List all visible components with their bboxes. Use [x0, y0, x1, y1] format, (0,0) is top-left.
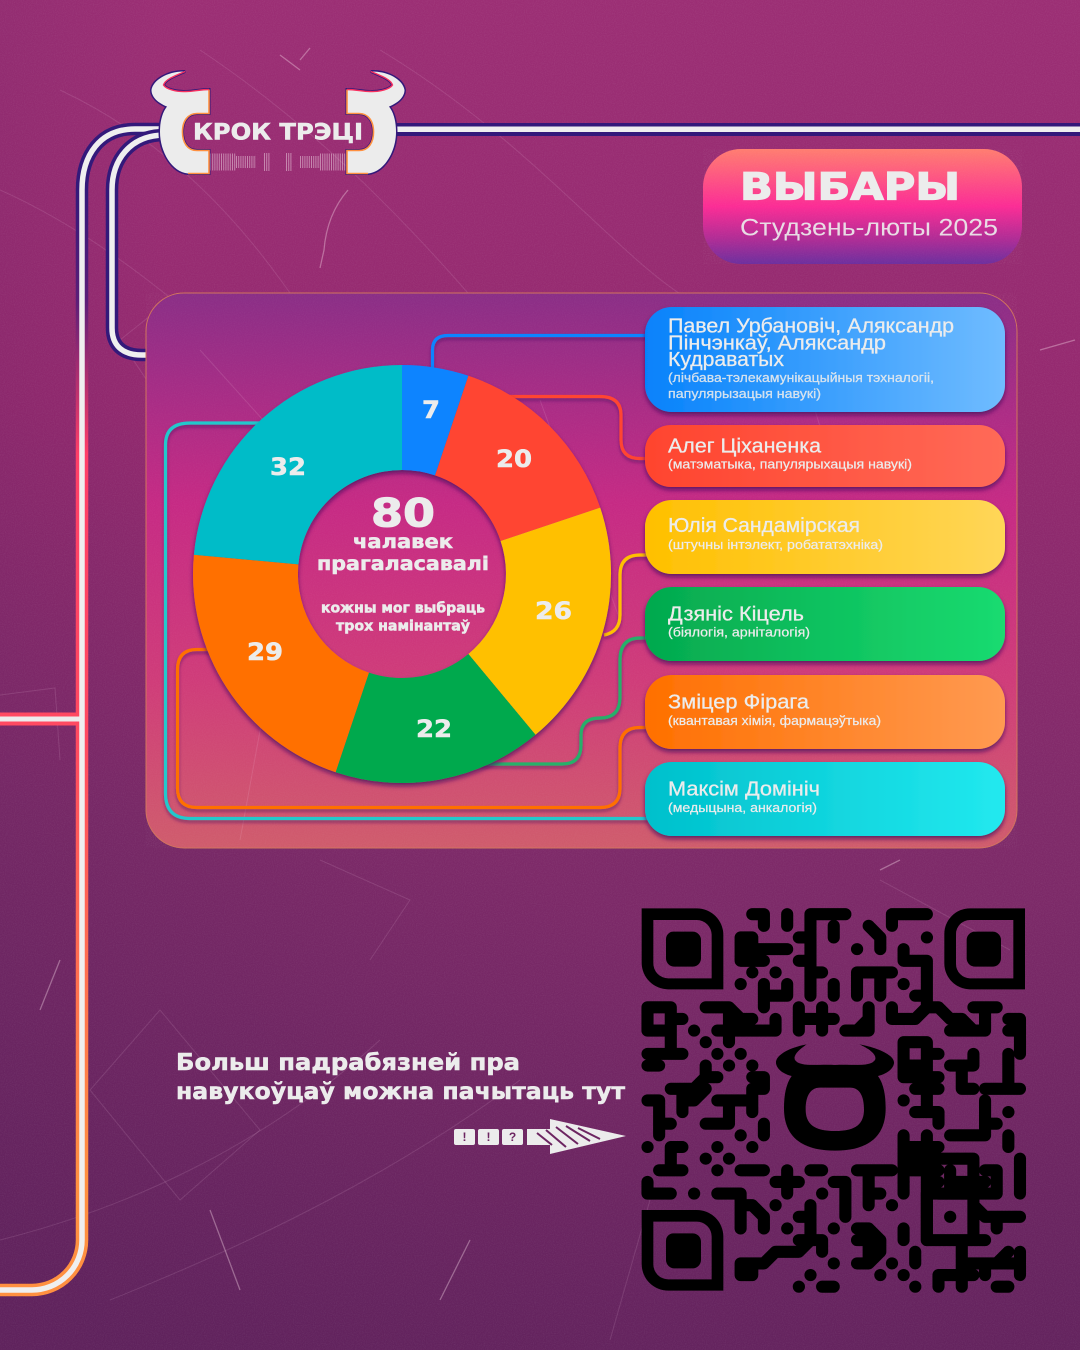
logo: audio wave	[210, 154, 346, 170]
arrow to the QR code: ?	[509, 1130, 516, 1144]
nominee: Sandamirskaya	[645, 500, 1005, 574]
nominee: Tsikhanenka: (матэматыка, папулярыхацыя навукі)	[668, 458, 912, 472]
value 20: 20	[496, 445, 532, 473]
segment 32	[194, 365, 402, 564]
note line 1: кожны мог выбраць	[321, 600, 485, 616]
value 32: 32	[270, 453, 306, 481]
donut centre text	[317, 492, 489, 634]
nominee: Sandamirskaya: (штучны інтэлект, робататэхніка)	[668, 538, 883, 552]
logo: wordmark: КРОК ТРЭЦІ	[193, 120, 363, 146]
panel: election results	[146, 293, 1017, 848]
note line 2: трох намінантаў	[336, 618, 470, 634]
nominee: Kitsel	[645, 587, 1005, 661]
left rail from logo to bottom	[0, 129, 165, 1290]
logo: right horn bracket	[347, 71, 404, 174]
nominee: Urbanovich, Pinchenkau, Kudravatykh: Павел Урбановіч, Аляксандр	[668, 314, 954, 338]
nominee: Kitsel: (біялогія, арніталогія)	[668, 626, 810, 640]
QR code	[642, 908, 1025, 1291]
nominee: Dominich	[645, 762, 1005, 836]
date: Студзень-люты 2025	[740, 214, 998, 242]
arrow to the QR code: !	[462, 1130, 466, 1144]
voters label line 2: прагаласавалі	[317, 553, 489, 575]
nominee: Firaha: Зміцер Фірага	[668, 690, 810, 714]
nominee: Sandamirskaya: Юлія Сандамірская	[668, 514, 860, 537]
rail from logo to panel	[112, 135, 165, 355]
value 22: 22	[416, 715, 452, 743]
QR finders and centre emblem	[642, 908, 1025, 1291]
nominee: Tsikhanenka: Алег Ціханенка	[668, 434, 822, 458]
nominee: Tsikhanenka	[645, 425, 1005, 487]
nominee: Dominich: (медыцына, анкалогія)	[668, 801, 817, 815]
connector: blue	[432, 336, 648, 372]
value 26: 26	[535, 597, 572, 625]
donut values	[247, 396, 572, 743]
nominee: Urbanovich, Pinchenkau, Kudravatykh: Кудраватых	[668, 348, 785, 371]
connector: orange	[178, 650, 648, 808]
nominee: Urbanovich, Pinchenkau, Kudravatykh	[645, 307, 1005, 412]
connector: yellow	[604, 555, 648, 635]
total voters: 80	[371, 492, 435, 536]
nominee: Firaha: (квантавая хімія, фармацэўтыка)	[668, 714, 881, 728]
segment 7	[402, 365, 468, 475]
value 7: 7	[422, 396, 440, 424]
voters label line 1: чалавек	[353, 531, 453, 553]
segment 26	[468, 508, 611, 735]
nominee: Firaha	[645, 675, 1005, 749]
logo: left horn bracket	[152, 71, 209, 174]
nominee: Urbanovich, Pinchenkau, Kudravatykh: папулярызацыя навукі)	[668, 387, 821, 401]
connector lines	[166, 336, 648, 818]
logo	[152, 71, 404, 174]
call to action text	[176, 1050, 626, 1105]
connector: red	[505, 396, 648, 458]
QR modules	[648, 914, 1020, 1287]
nominee: Kitsel: Дзяніс Кіцель	[668, 602, 804, 626]
segment 20	[435, 376, 600, 541]
nominee: Urbanovich, Pinchenkau, Kudravatykh: (лічбава-тэлекамунікацыйныя тэхналогіі,	[668, 371, 934, 385]
title badge	[703, 149, 1022, 264]
segment 22	[336, 654, 536, 783]
nominee: Dominich: Максім Домініч	[668, 778, 820, 800]
call to action text: Больш падрабязней пра	[176, 1050, 520, 1076]
connector: green	[480, 638, 648, 764]
arrow to the QR code	[454, 1119, 626, 1154]
nominee: Urbanovich, Pinchenkau, Kudravatykh: Пінчэнкаў, Аляксандр	[668, 332, 886, 354]
segment 29	[193, 555, 369, 772]
connector: teal	[166, 423, 648, 818]
rail to the right edge	[390, 123, 1080, 136]
arrow to the QR code: !	[486, 1130, 490, 1144]
title: ВЫБАРЫ	[740, 166, 960, 208]
call to action text: навукоўцаў можна пачытаць тут	[176, 1079, 626, 1105]
donut chart	[193, 365, 611, 783]
value 29: 29	[247, 638, 283, 666]
